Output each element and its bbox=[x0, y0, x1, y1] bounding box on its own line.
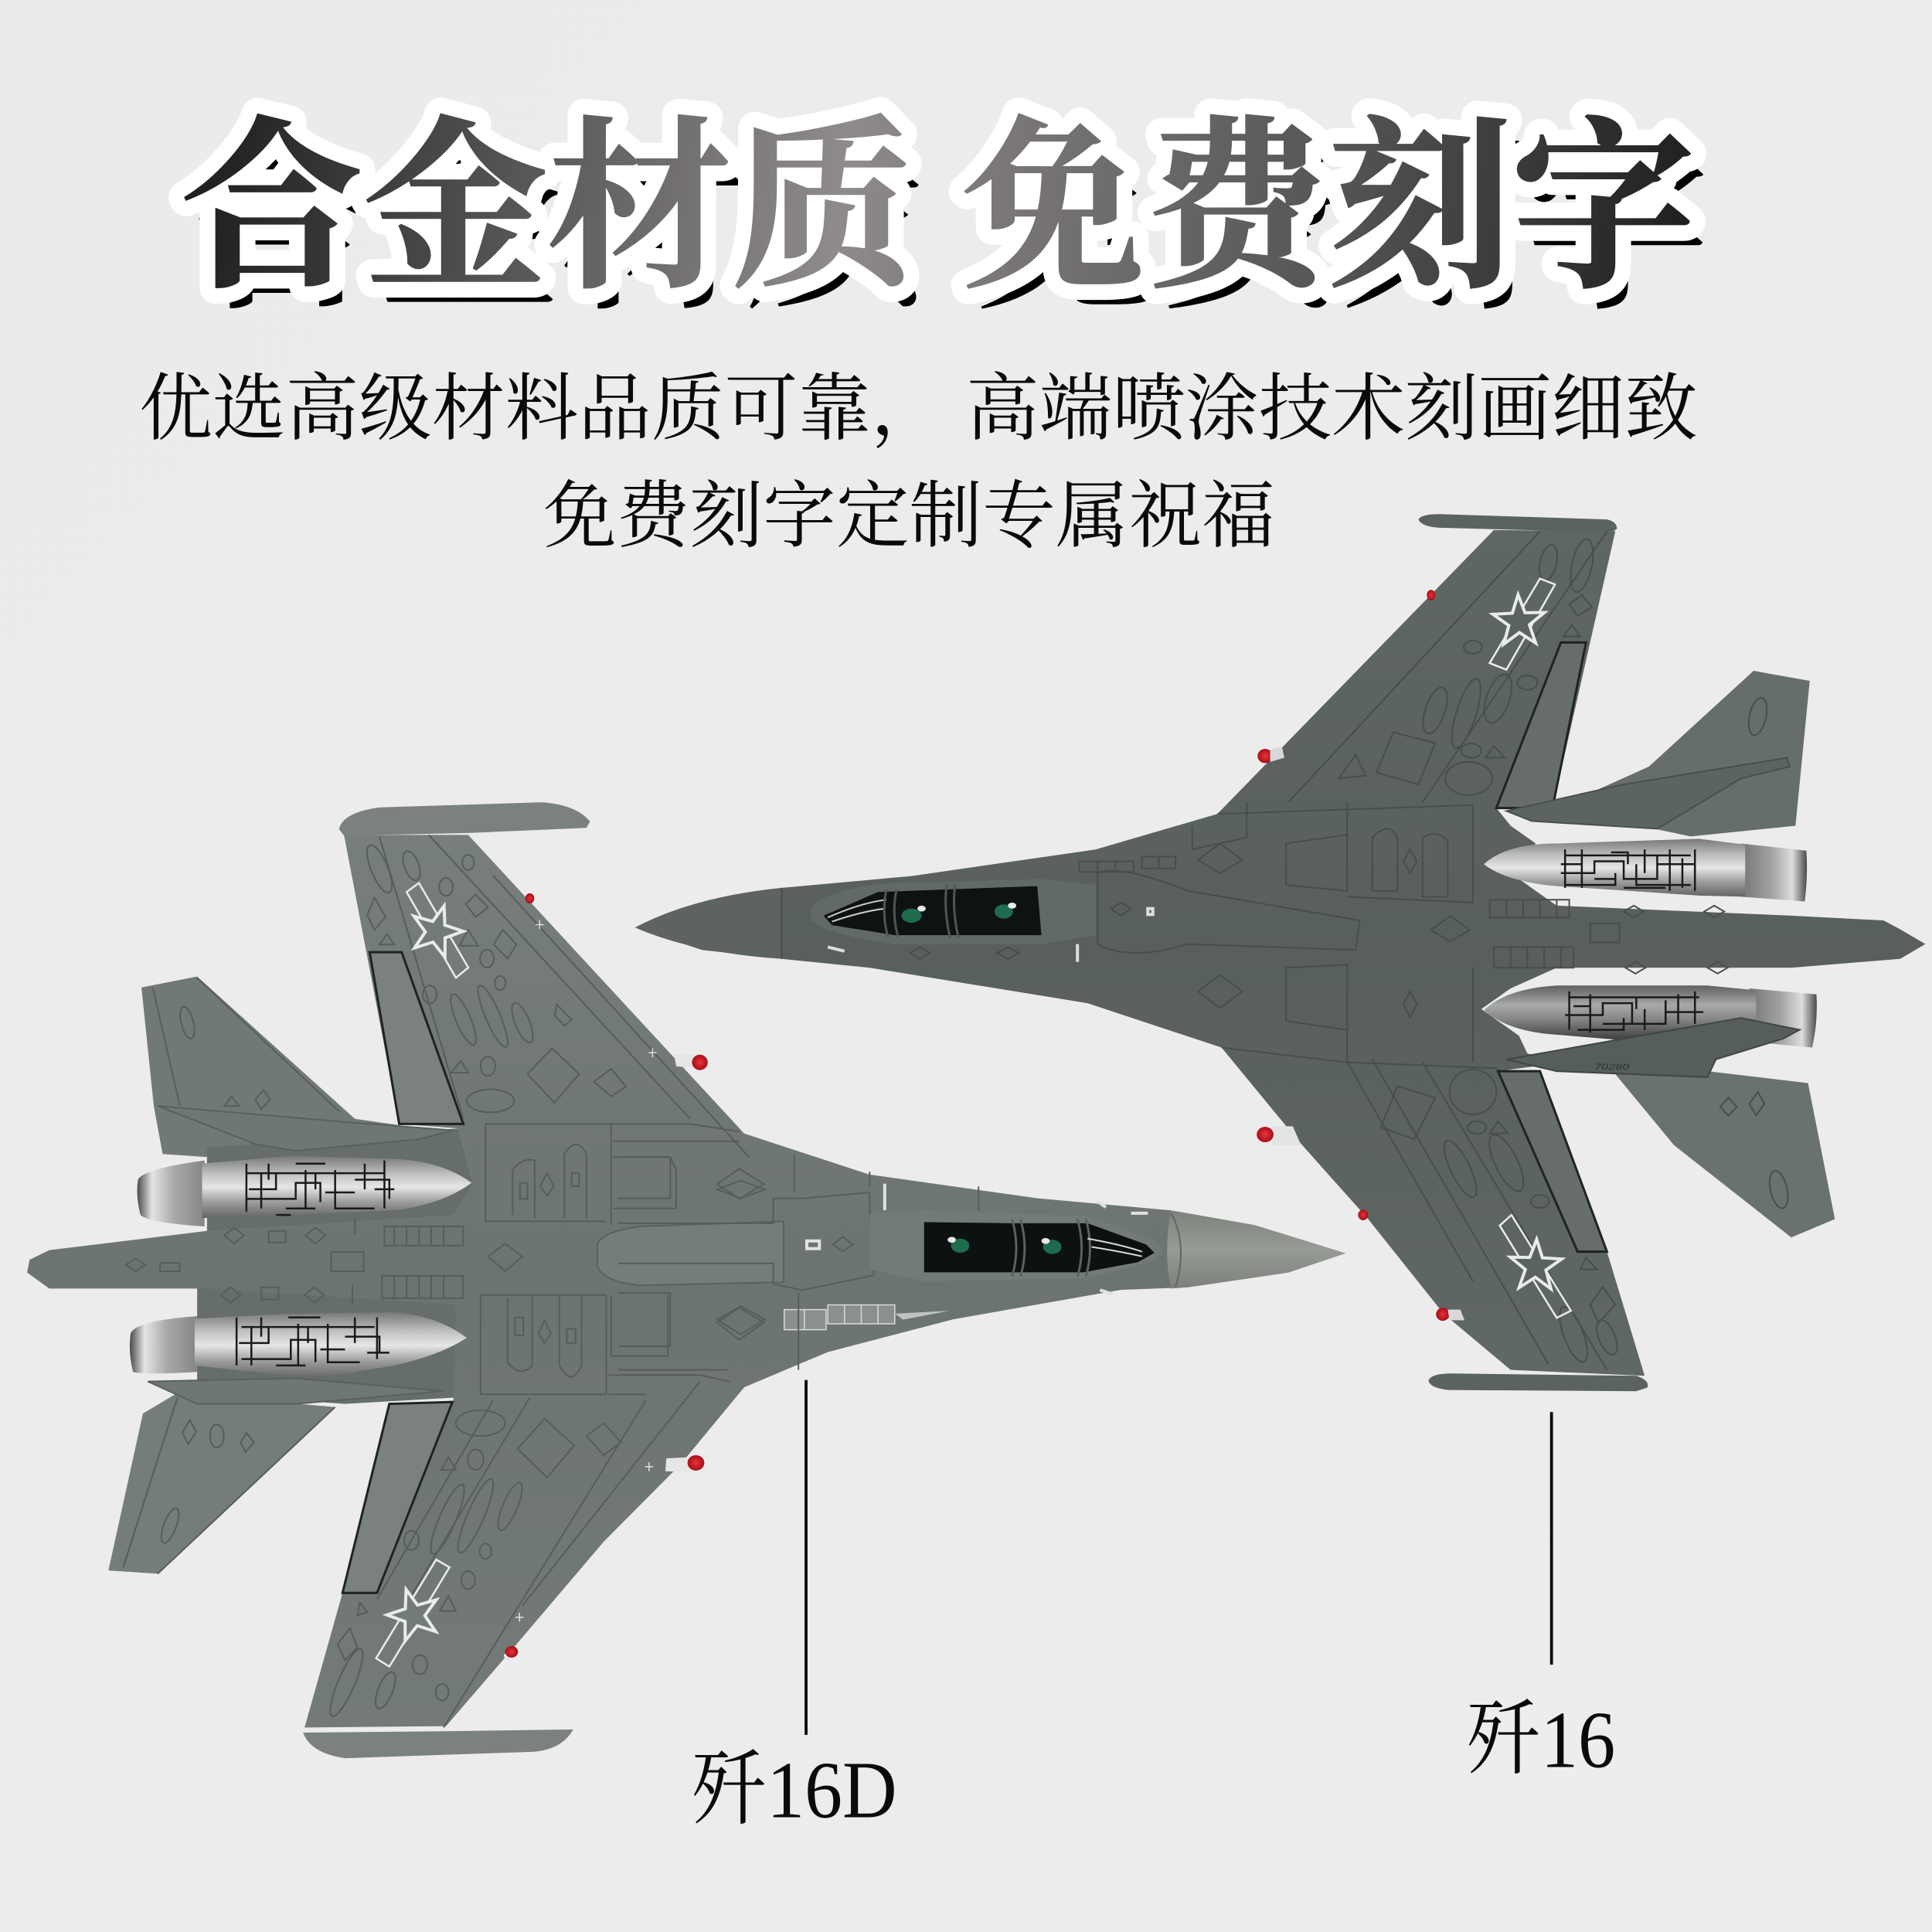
upper wingtip rail bbox=[1418, 514, 1617, 532]
white probes bbox=[807, 1184, 1148, 1294]
title: 合金材质 bbox=[180, 60, 914, 324]
lower wingtip rail bbox=[1428, 1373, 1648, 1391]
panel lines bbox=[781, 531, 1791, 1370]
upper tail fin bbox=[1556, 671, 1810, 836]
lower stabilizer bbox=[148, 1378, 444, 1404]
lower engine circuitry bbox=[236, 1318, 389, 1366]
title: 免费刻字 bbox=[961, 60, 1696, 324]
small white probes bbox=[828, 909, 1153, 962]
lower engine nozzle bbox=[130, 1316, 197, 1373]
upper tail fin bbox=[141, 977, 419, 1161]
dorsal spine front bbox=[618, 1192, 874, 1290]
panel lines bbox=[123, 835, 764, 1727]
lower engine nacelle bbox=[1484, 985, 1756, 1042]
lower tail fin bbox=[1615, 1071, 1835, 1237]
lower roundel bbox=[376, 1560, 451, 1667]
nose cone bbox=[1167, 1210, 1345, 1288]
lower tail fin bbox=[108, 1393, 335, 1573]
upper engine nacelle bbox=[202, 1156, 471, 1218]
title: 免费刻字 bbox=[975, 81, 1709, 345]
wing flaps bbox=[1496, 642, 1607, 1252]
dorsal spine bbox=[597, 1221, 784, 1285]
lower engine circuitry bbox=[1565, 992, 1703, 1032]
upper engine circuitry bbox=[247, 1161, 394, 1215]
J-16D front detail bbox=[618, 1154, 1181, 1370]
upper roundel bbox=[1490, 579, 1555, 670]
nose cone bbox=[635, 888, 781, 959]
upper roundel bbox=[400, 883, 469, 978]
label: J-16: 歼16 bbox=[1466, 1694, 1615, 1784]
upper engine nozzle bbox=[1741, 844, 1807, 902]
upper stabilizer bbox=[1506, 758, 1790, 828]
wing flaps bbox=[342, 952, 463, 1593]
lower roundel bbox=[1500, 1215, 1571, 1318]
title: 合金材质 bbox=[193, 81, 928, 345]
subtitle line 2: 免费刻字定制专属祝福 bbox=[543, 477, 1275, 557]
upper engine nacelle bbox=[1484, 838, 1745, 896]
lower engine nacelle bbox=[195, 1312, 467, 1378]
upper wingtip rail bbox=[339, 802, 590, 835]
nacelle backing bbox=[197, 1128, 473, 1404]
small crosses bbox=[515, 920, 656, 1622]
title bbox=[180, 60, 1709, 345]
subtitle line 1 left: 优选高级材料品质可靠， bbox=[139, 369, 944, 450]
label: J-16D: 歼16D bbox=[691, 1745, 897, 1835]
nose ring bbox=[1172, 1213, 1181, 1287]
lower stabilizer bbox=[1506, 1018, 1800, 1077]
lower engine nozzle bbox=[1750, 988, 1817, 1048]
leader line J-16D bbox=[804, 1380, 808, 1735]
vents bbox=[784, 1304, 949, 1330]
missile tips bbox=[1257, 590, 1464, 1321]
missile tips bbox=[504, 893, 708, 1659]
upper stabilizer bbox=[158, 1106, 454, 1151]
title: 免费刻字 bbox=[961, 60, 1696, 324]
airframe bbox=[635, 530, 1925, 1376]
cockpit bbox=[811, 879, 1096, 944]
upper engine nozzle bbox=[138, 1161, 205, 1226]
title: 合金材质 bbox=[180, 60, 914, 324]
airframe bbox=[27, 835, 1345, 1727]
lower wingtip rail bbox=[303, 1730, 573, 1758]
forward panels bbox=[618, 1154, 978, 1370]
plane: J-16 right bbox=[635, 514, 1925, 1391]
cockpit bbox=[869, 1210, 1163, 1281]
serial number: 70280 bbox=[1594, 1061, 1630, 1071]
leader line J-16 bbox=[1550, 1412, 1553, 1665]
plane: J-16D left bbox=[27, 802, 1345, 1758]
upper engine circuitry bbox=[1561, 849, 1695, 891]
subtitle line 1 right: 高端喷涂技术刻画细致 bbox=[966, 369, 1698, 450]
